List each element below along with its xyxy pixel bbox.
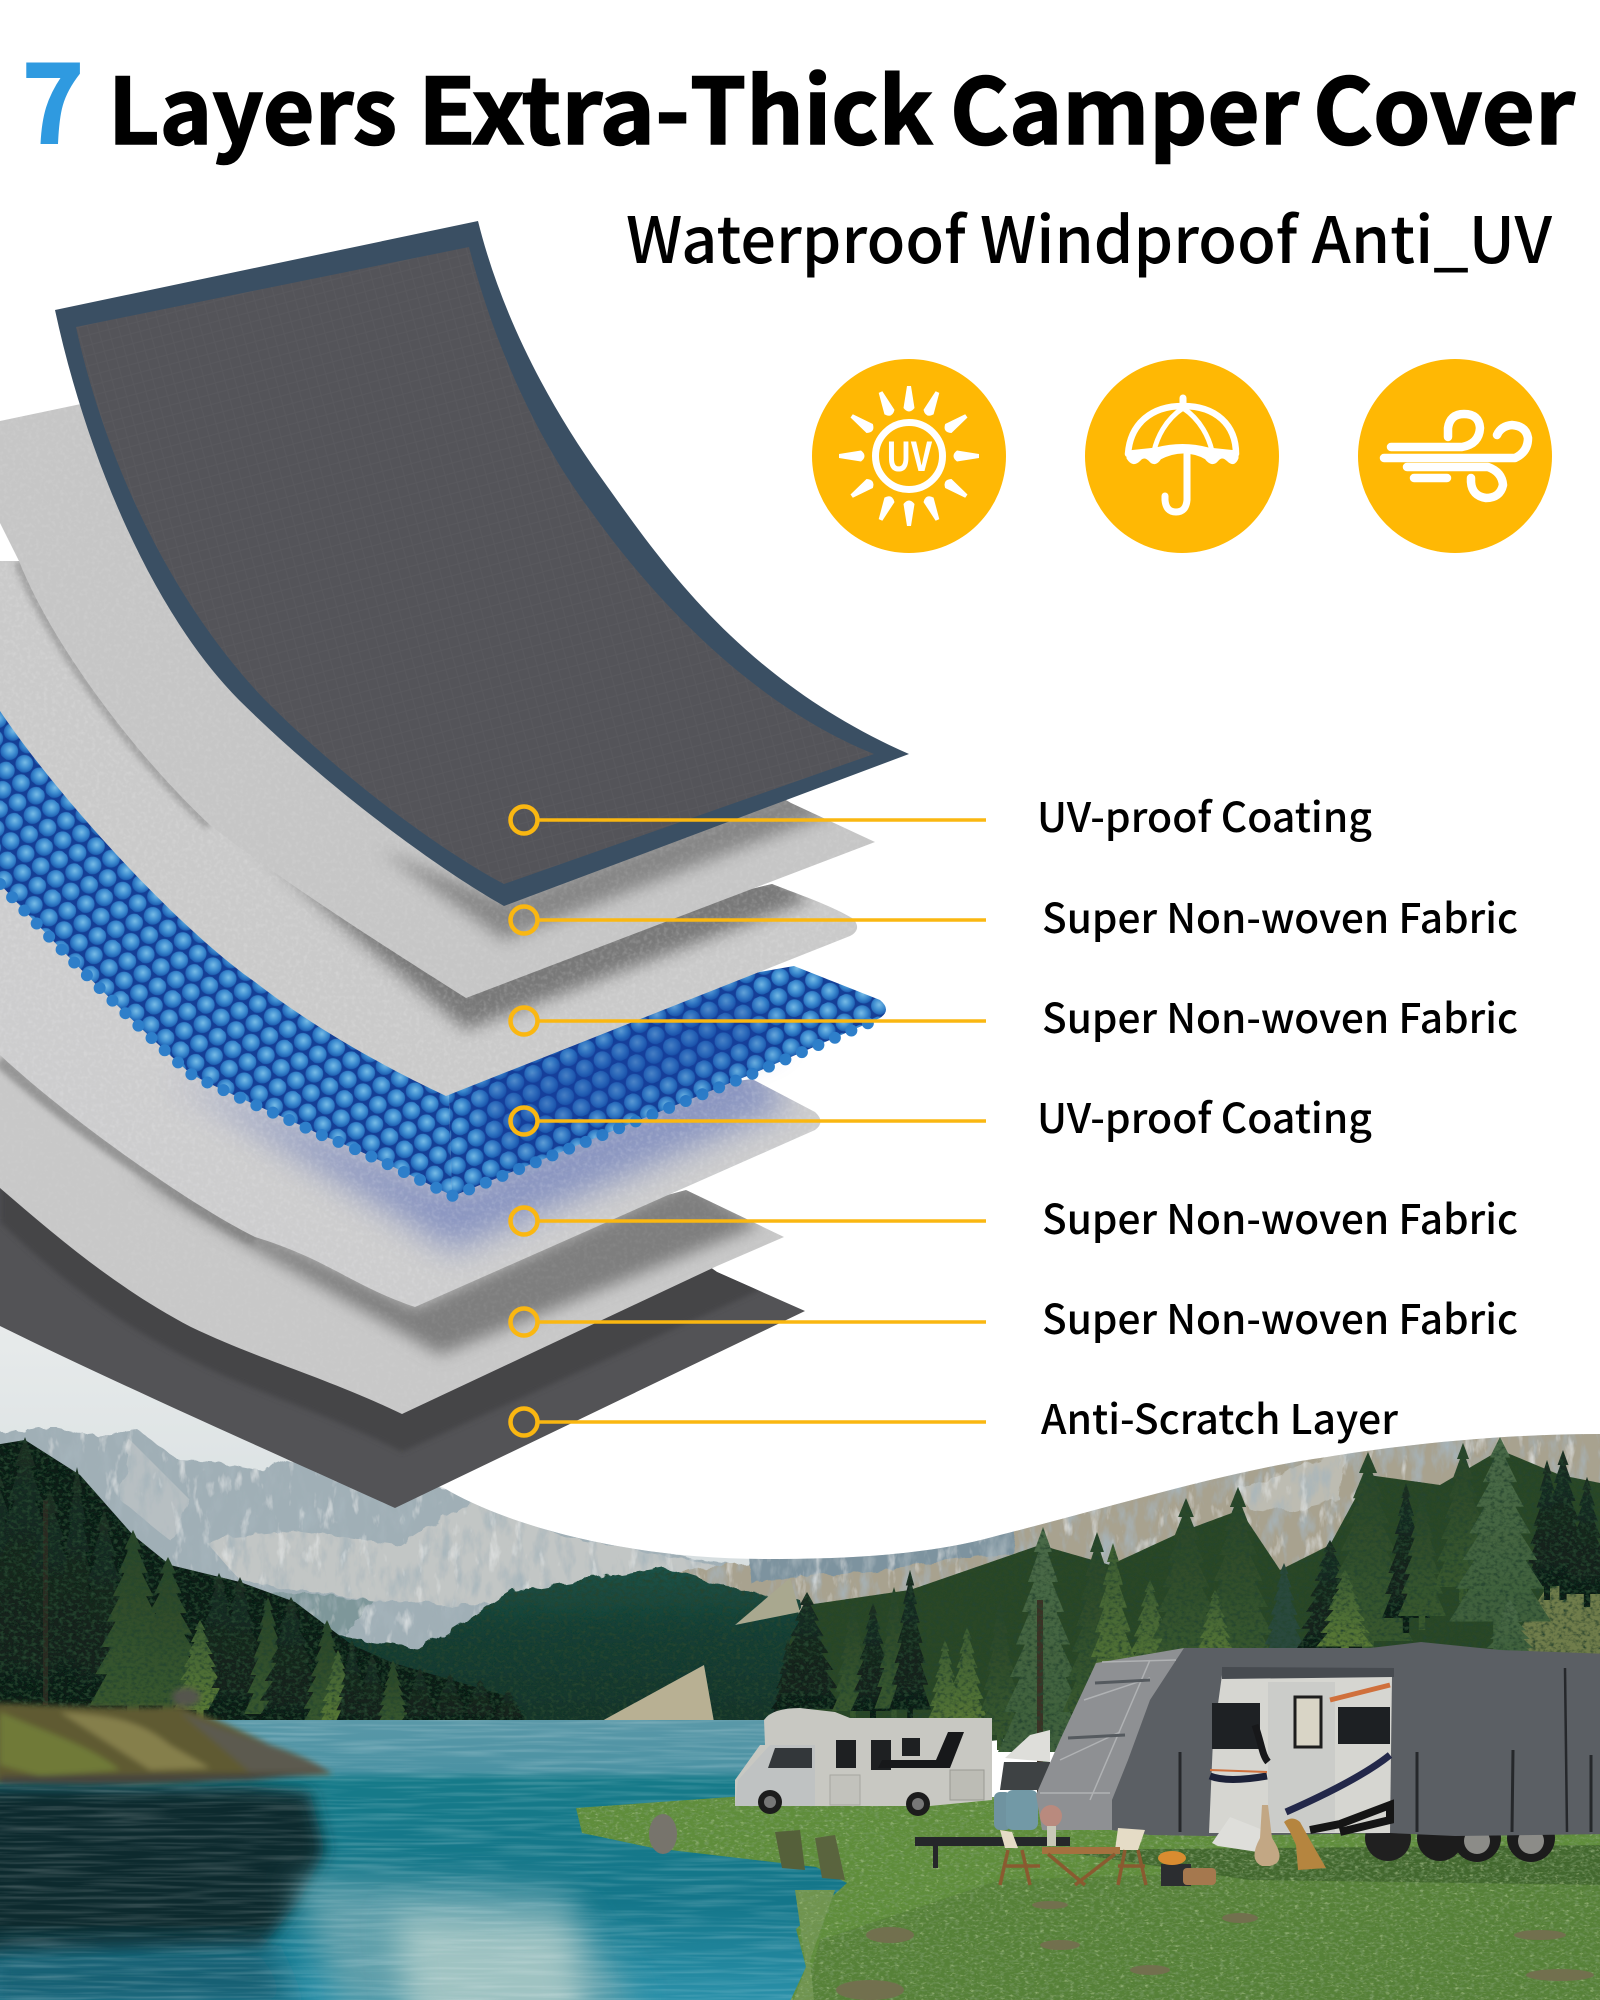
flower vase bbox=[1040, 1805, 1062, 1846]
callout 7: anti-scratch layer: Anti-Scratch Layer bbox=[1041, 1386, 1398, 1446]
layer 5: non-woven fabric bbox=[0, 800, 830, 1310]
callout 6: super non-woven fabric bbox=[510, 1286, 1518, 1346]
guitar bbox=[1254, 1805, 1280, 1866]
title word: Layers: Layers bbox=[108, 39, 397, 171]
title word: Extra-: Extra- bbox=[418, 39, 690, 171]
RV door bbox=[1268, 1682, 1335, 1832]
RV awning bbox=[1222, 1667, 1394, 1679]
title word: Thick: Thick bbox=[690, 39, 933, 171]
callout 3: super non-woven fabric: Super Non-woven Fabric bbox=[1042, 985, 1518, 1045]
icon: wind bbox=[1358, 359, 1552, 553]
dirt patches on grass bbox=[836, 1901, 1594, 2000]
distant mountains left bbox=[0, 1427, 730, 1650]
callout 2: super non-woven fabric bbox=[510, 885, 1518, 945]
RV straps and seams bbox=[1180, 1668, 1591, 1832]
title bbox=[22, 15, 1575, 175]
layer 3: non-woven fabric bbox=[0, 500, 860, 1100]
callout 3: super non-woven fabric bbox=[510, 985, 1518, 1045]
title word: Cover: Cover bbox=[1313, 39, 1575, 171]
folding chair bbox=[1212, 1817, 1268, 1852]
lake bbox=[0, 1720, 860, 2000]
gas tanks bbox=[994, 1790, 1038, 1830]
exposed RV body bbox=[1209, 1675, 1392, 1833]
callout 1: UV-proof coating bbox=[510, 784, 1372, 844]
RV front cap bbox=[1036, 1648, 1184, 1830]
wheels bbox=[1365, 1833, 1555, 1862]
shoreline rocks bbox=[649, 1814, 845, 1880]
layer 4: blue bubble layer bbox=[0, 640, 886, 1196]
left forest bbox=[0, 1437, 530, 1740]
icon: umbrella bbox=[1085, 359, 1279, 553]
valley forest bbox=[337, 1567, 800, 1725]
small motorhome bbox=[735, 1708, 992, 1816]
icon: UV sun: UV bbox=[886, 425, 932, 483]
left lake bank bbox=[0, 1688, 332, 1785]
callout 6: super non-woven fabric: Super Non-woven Fabric bbox=[1042, 1286, 1518, 1346]
RV side cover bbox=[1112, 1642, 1600, 1836]
callout 4: UV-proof coating bbox=[510, 1085, 1372, 1145]
RV stripes bbox=[1210, 1685, 1390, 1832]
pale hillsides in the valley bbox=[600, 1578, 800, 1722]
sky bbox=[0, 1326, 1309, 1566]
picnic basket bbox=[1158, 1851, 1216, 1886]
layer 2: non-woven fabric bbox=[0, 400, 880, 1000]
callout lines and markers bbox=[510, 784, 1518, 1446]
callout 4: UV-proof coating: UV-proof Coating bbox=[1037, 1085, 1372, 1145]
callout 2: super non-woven fabric: Super Non-woven Fabric bbox=[1042, 885, 1518, 945]
callout 7: anti-scratch layer bbox=[510, 1386, 1398, 1446]
dog bbox=[1284, 1818, 1326, 1870]
layer 6: non-woven fabric bbox=[0, 980, 800, 1420]
title word: Camper: Camper bbox=[950, 39, 1299, 171]
layer 1: top UV-proof coating bbox=[55, 221, 909, 906]
icon: UV sun bbox=[812, 359, 1006, 553]
background photo: lake, mountains and campers bbox=[0, 1300, 1600, 2000]
meadow bbox=[576, 1796, 1600, 2000]
distant mountains right bbox=[678, 1434, 1600, 1614]
picnic set: table and chairs bbox=[1000, 1805, 1146, 1885]
RV windows bbox=[1212, 1703, 1260, 1749]
layered material stack bbox=[0, 221, 909, 1508]
callout 1: UV-proof coating: UV-proof Coating bbox=[1037, 784, 1372, 844]
callout 5: super non-woven fabric bbox=[510, 1186, 1518, 1246]
title number 7: 7 bbox=[22, 15, 84, 175]
third camper in the background bbox=[1000, 1730, 1050, 1790]
bench bbox=[915, 1837, 1070, 1868]
layer 7: anti-scratch layer bbox=[0, 1000, 805, 1508]
callout 5: super non-woven fabric: Super Non-woven Fabric bbox=[1042, 1186, 1518, 1246]
subtitle: Waterproof Windproof Anti_UV bbox=[626, 190, 1553, 282]
right forest bbox=[770, 1437, 1600, 1815]
covered RV bbox=[1036, 1642, 1600, 1862]
